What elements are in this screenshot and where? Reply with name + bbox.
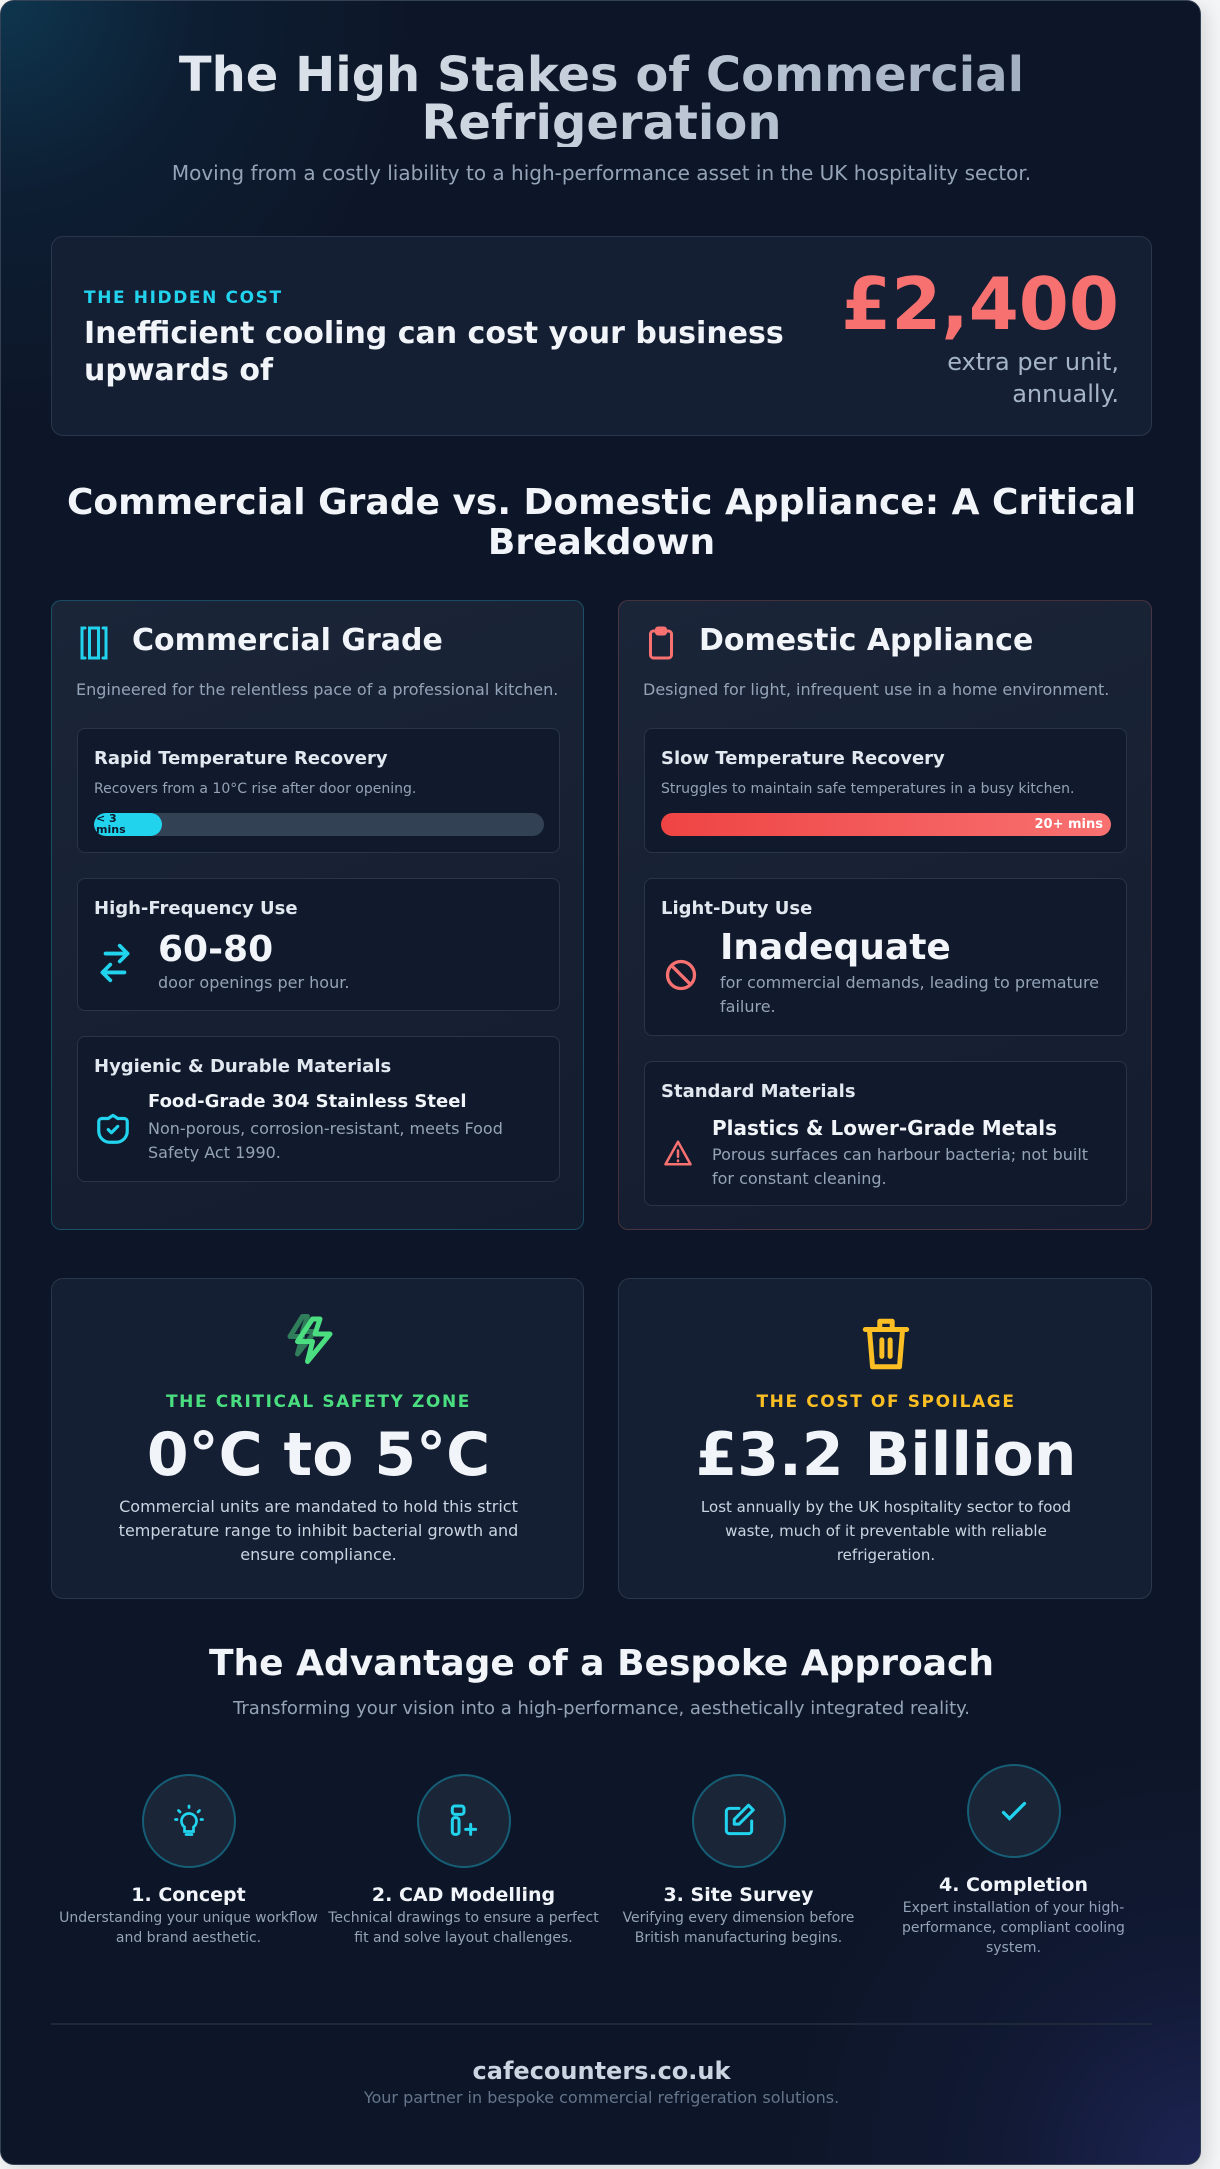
step: completion: [902, 1764, 1125, 1956]
stat: £2,400: [841, 262, 1119, 408]
icon: warning: [664, 1140, 692, 1166]
card: standard materials: [644, 1061, 1127, 1206]
panel: hidden cost: [51, 236, 1152, 436]
step: site survey: 3. Site Survey: [663, 1884, 814, 1906]
step: site survey: Verifying every dimension before: [623, 1910, 854, 1926]
icon: arrows: [100, 944, 130, 982]
bar: recovery time: mins: [96, 823, 126, 836]
footer: cafecounters.co.uk: [473, 2057, 730, 2085]
panel: domestic appliance: [618, 600, 1152, 1230]
step: cad modelling: 2. CAD Modelling: [372, 1884, 555, 1906]
card: rapid recovery: Rapid Temperature Recovery: [94, 748, 388, 769]
card: high frequency: door openings per hour.: [158, 973, 349, 992]
text: spoilage description: Lost annually by the UK hospitality sector to food waste, much of it preventable with reliable refrigeration.: [701, 1498, 1071, 1564]
text: hidden cost statement: Inefficient cooling can cost your business upwards of: [84, 316, 784, 388]
card: slow recovery: [644, 728, 1127, 853]
card: hygienic materials: Hygienic & Durable Materials: [94, 1056, 391, 1077]
text: commercial intro: Engineered for the relentless pace of a professional kitchen.: [76, 680, 558, 699]
text: safety description: Commercial units are mandated to hold this strict temperature range to inhibit bacterial growth and ensure compliance.: [119, 1497, 518, 1564]
step: cad modelling: Technical drawings to ensure a perfect fit and solve layout challenges.: [328, 1910, 599, 1946]
card: slow recovery: Slow Temperature Recovery: [661, 748, 945, 769]
stat: £2,400: extra per unit,: [947, 348, 1119, 376]
label: critical safety zone: THE CRITICAL SAFETY ZONE: [166, 1392, 471, 1412]
step: concept: Understanding your unique workflow and brand aesthetic.: [59, 1910, 318, 1946]
title: The High Stakes of Commercial: [179, 47, 1024, 103]
title: Refrigeration: [421, 95, 782, 151]
icon: edit: [692, 1774, 786, 1868]
card: slow recovery: Struggles to maintain safe temperatures in a busy kitchen.: [661, 781, 1074, 797]
step: completion: Expert installation of your high-performance, compliant cooling system.: [902, 1900, 1125, 1956]
card: light duty: [644, 878, 1127, 1036]
card: standard materials: Porous surfaces can harbour bacteria; not built for constant cleaning.: [712, 1145, 1088, 1188]
card: hygienic materials: Non-porous, corrosion-resistant, meets Food Safety Act 1990.: [148, 1119, 503, 1162]
heading: commercial grade: Commercial Grade: [132, 623, 443, 658]
card: high frequency: [77, 878, 560, 1011]
step: concept: 1. Concept: [131, 1884, 246, 1906]
heading: domestic appliance: Domestic Appliance: [699, 623, 1033, 658]
text: domestic intro: Designed for light, infrequent use in a home environment.: [643, 680, 1109, 699]
icon: fridge: [80, 626, 108, 660]
step: site survey: British manufacturing begins.: [635, 1930, 842, 1946]
card: hygienic materials: Food-Grade 304 Stainless Steel: [148, 1091, 467, 1112]
panel: commercial grade: [51, 600, 584, 1230]
card: light duty: Inadequate: [720, 927, 951, 968]
bar: recovery time: [661, 813, 1111, 836]
icon: lightning: [288, 1314, 332, 1364]
icon: clipboard: [649, 626, 673, 660]
bar: recovery time: [94, 813, 544, 836]
icon: check: [966, 1764, 1060, 1858]
step: completion: 4. Completion: [939, 1874, 1088, 1896]
icon: lightbulb: [142, 1774, 236, 1868]
stat: £2,400: £2,400: [841, 262, 1119, 346]
card: light duty: for commercial demands, leading to premature failure.: [720, 973, 1099, 1016]
title: [1, 51, 1202, 147]
card: standard materials: Plastics & Lower-Grade Metals: [712, 1116, 1057, 1140]
steps: [59, 1764, 1125, 1956]
bar: recovery time: 20+ mins: [1034, 817, 1103, 832]
footer: [364, 2057, 839, 2107]
stat: £3.2 billion: £3.2 Billion: [696, 1420, 1076, 1490]
icon: shield check: [97, 1114, 129, 1144]
label: cost of spoilage: THE COST OF SPOILAGE: [756, 1392, 1016, 1412]
subtitle: Moving from a costly liability to a high-performance asset in the UK hospitality sector.: [172, 161, 1031, 185]
stat: temperature range: 0°C to 5°C: [147, 1420, 490, 1490]
card: standard materials: Standard Materials: [661, 1081, 856, 1102]
panel: cost of spoilage: [618, 1278, 1152, 1599]
card: hygienic materials: [77, 1036, 560, 1182]
icon: bin: [862, 1318, 910, 1370]
label: the hidden cost: THE HIDDEN COST: [84, 288, 283, 308]
card: high frequency: 60-80: [158, 929, 273, 970]
card: light duty: Light-Duty Use: [661, 898, 812, 919]
step: cad modelling: [328, 1774, 599, 1946]
step: concept: [59, 1774, 318, 1946]
heading: comparison: Commercial Grade vs. Domestic Appliance: A Critical Breakdown: [67, 482, 1136, 563]
footer: Your partner in bespoke commercial refrigeration solutions.: [364, 2088, 839, 2107]
icon: ban: [666, 960, 696, 990]
panel: critical safety zone: [51, 1278, 584, 1599]
stat: £2,400: annually.: [1012, 380, 1119, 408]
card: rapid recovery: [77, 728, 560, 853]
step: site survey: [622, 1774, 854, 1946]
icon: blocks: [416, 1774, 510, 1868]
card: rapid recovery: Recovers from a 10°C rise after door opening.: [94, 781, 416, 797]
heading: bespoke approach: The Advantage of a Bespoke Approach: [209, 1643, 994, 1684]
subtitle: bespoke: Transforming your vision into a high-performance, aesthetically integrated reality.: [233, 1698, 970, 1719]
card: high frequency: High-Frequency Use: [94, 898, 298, 919]
